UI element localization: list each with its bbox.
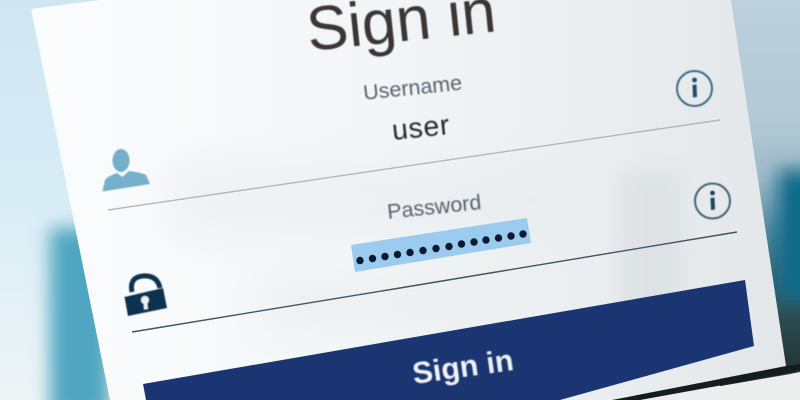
sign in button (143, 280, 754, 400)
lower screen panel behind the dark edge (640, 372, 800, 400)
password dots (356, 230, 527, 264)
username underline (108, 120, 720, 210)
password field highlight (351, 218, 531, 272)
icon: info, password (695, 184, 730, 218)
password underline (132, 232, 737, 332)
dark card bottom edge (612, 364, 800, 400)
icon: user silhouette (102, 149, 150, 192)
button label: Sign in: Sign in (410, 343, 516, 391)
blurred background: right side (720, 0, 800, 400)
icon: padlock (124, 276, 167, 316)
username value: user (390, 109, 452, 147)
label: Password: Password (386, 190, 482, 224)
label: Username: Username (362, 71, 463, 105)
blurred background: left side (0, 0, 140, 400)
icon: info, username (677, 71, 712, 106)
